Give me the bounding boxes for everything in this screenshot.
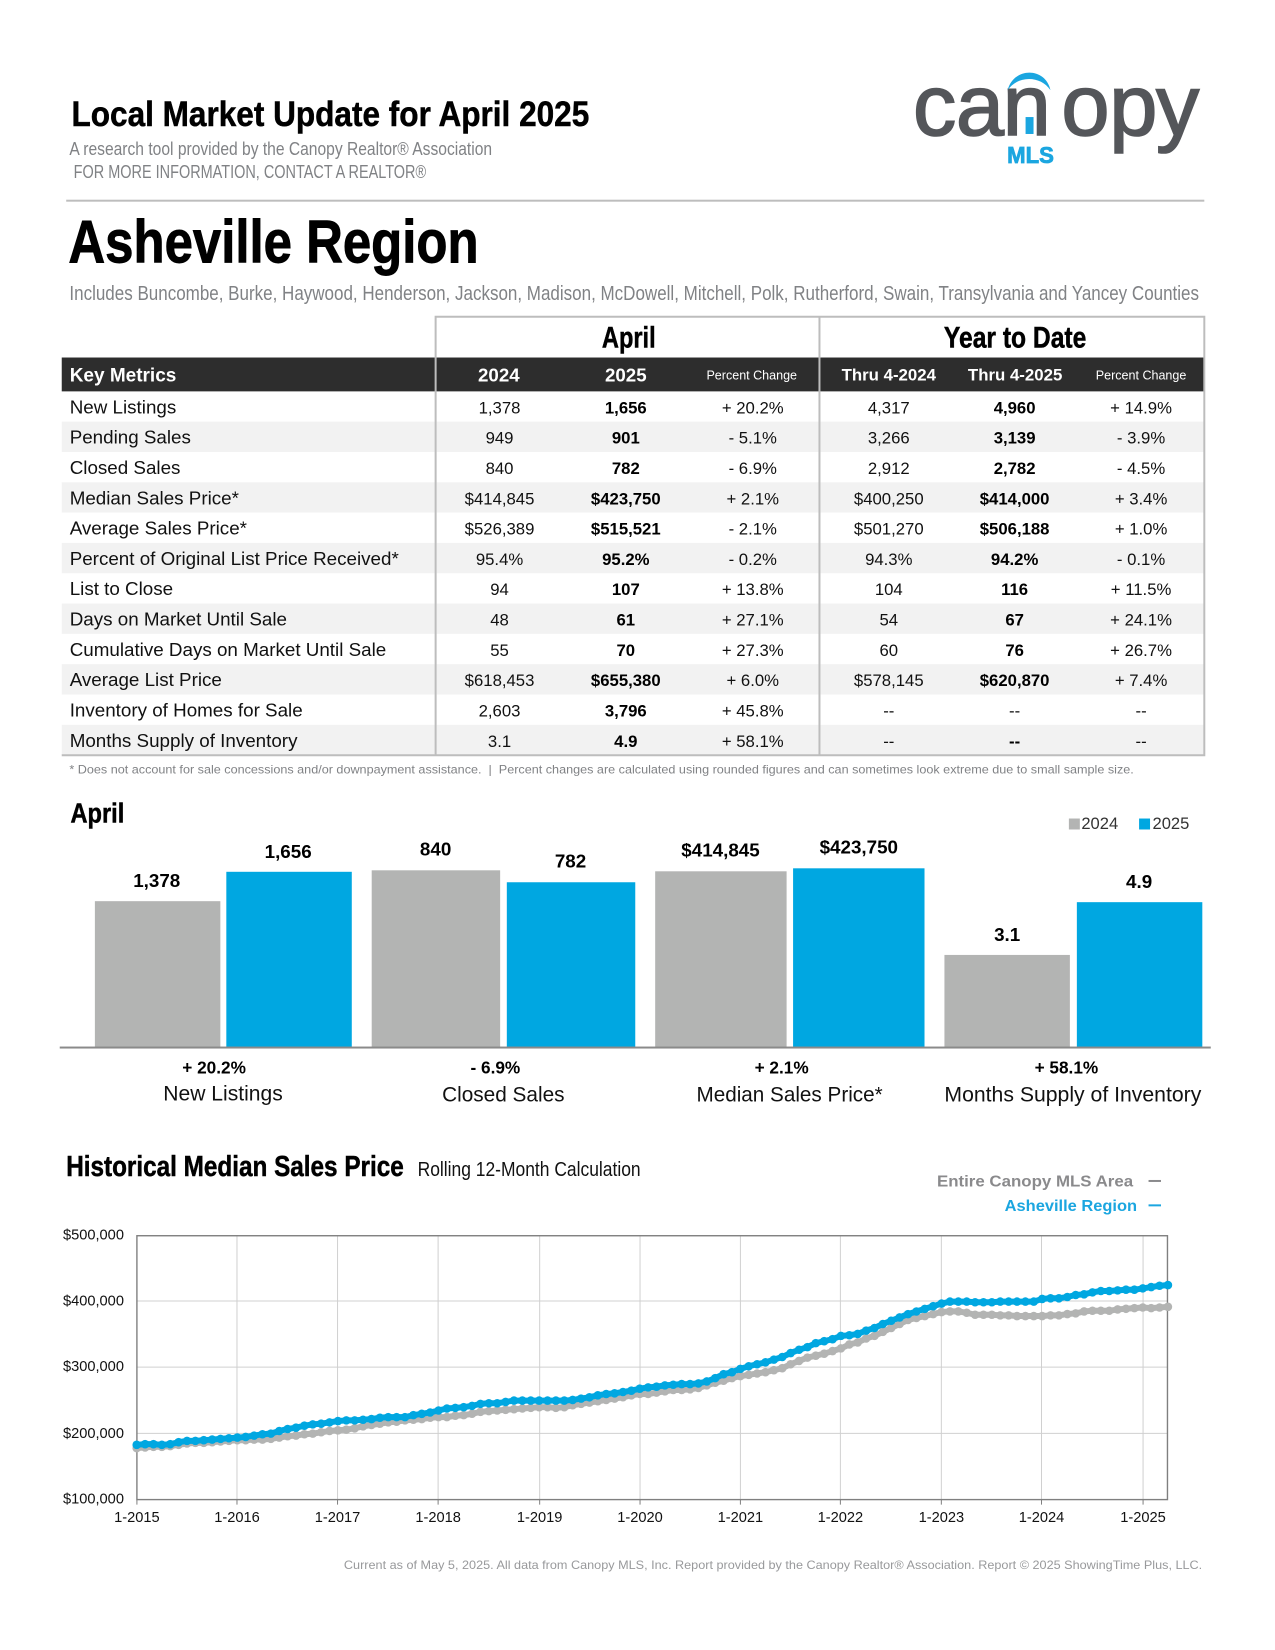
panel: key metrics table: 76 [1005, 641, 1024, 660]
bars: Median Sales Price [655, 836, 925, 1106]
bars: Months Supply of Inventory: 4.9 [1126, 871, 1152, 892]
panel: key metrics table [62, 317, 1204, 755]
panel: key metrics table: 70 [616, 641, 635, 660]
panel: key metrics table: + 27.1% [722, 611, 784, 630]
panel: key metrics table: $400,250 [854, 489, 924, 508]
bars: Months Supply of Inventory: 3.1 [994, 924, 1020, 945]
panel: key metrics table: 67 [1005, 611, 1024, 630]
column group headings: April [602, 322, 656, 355]
bars: New Listings [95, 841, 352, 1105]
table header row: Key Metrics [70, 365, 176, 386]
panel: key metrics table: -- [1009, 732, 1020, 751]
bars: Months Supply of Inventory: + 58.1% [1035, 1057, 1098, 1077]
panel: key metrics table: - 3.9% [1117, 429, 1165, 448]
panel: key metrics table: 94 [490, 580, 509, 599]
panel: key metrics table: -- [1009, 701, 1020, 720]
panel: key metrics table: -- [1136, 732, 1147, 751]
panel: key metrics table: + 27.3% [722, 641, 784, 660]
panel: key metrics table: 94.3% [865, 550, 913, 569]
x axis labels: 1-2019 [517, 1510, 562, 1526]
panel: key metrics table: 95.2% [602, 550, 650, 569]
x axis labels: 1-2020 [617, 1510, 663, 1526]
panel: key metrics table: $526,389 [465, 520, 534, 539]
chart gridlines [137, 1236, 1167, 1500]
icon: logo door [1026, 117, 1034, 134]
panel: key metrics table: - 2.1% [729, 520, 777, 539]
x axis labels: 1-2025 [1120, 1510, 1166, 1526]
bars: Median Sales Price: $423,750 [820, 836, 898, 857]
panel: key metrics table: 54 [879, 611, 898, 630]
bars: Closed Sales: 782 [555, 850, 586, 871]
panel: key metrics table: $515,521 [591, 520, 661, 539]
title: Local Market Update for April 2025 [71, 95, 589, 134]
table rows: 1,378 [479, 398, 520, 417]
line chart legend: Entire Canopy MLS Area [937, 1173, 1133, 1190]
y axis labels: $300,000 [63, 1359, 124, 1375]
bars: New Listings: + 20.2% [182, 1057, 246, 1077]
panel: key metrics table: 61 [616, 611, 635, 630]
heading: April: April [70, 798, 124, 829]
x axis labels: 1-2024 [1019, 1510, 1064, 1526]
heading: historical chart: Rolling 12-Month Calculation [418, 1159, 641, 1181]
subtitle block: FOR MORE INFORMATION, CONTACT A REALTOR® [74, 161, 426, 182]
x axis labels: 1-2017 [315, 1510, 360, 1526]
panel: key metrics table: Months Supply of Inventory [70, 730, 298, 751]
panel: key metrics table: $618,453 [465, 671, 534, 690]
bars: New Listings: 1,656 [265, 841, 312, 862]
panel: key metrics table: -- [883, 701, 894, 720]
table header row [62, 358, 1204, 391]
x axis labels: 1-2023 [919, 1510, 964, 1526]
panel: key metrics table: $578,145 [854, 671, 924, 690]
panel: key metrics table: Percent of Original List Price Received* [70, 548, 399, 569]
bars: Closed Sales: - 6.9% [470, 1057, 520, 1077]
panel: key metrics table: -- [1136, 701, 1147, 720]
panel: key metrics table: 4.9 [614, 732, 637, 751]
panel: key metrics table: + 3.4% [1115, 489, 1167, 508]
bars: New Listings: 1,378 [133, 870, 180, 891]
panel: key metrics table: + 11.5% [1111, 580, 1171, 599]
panel: key metrics table: - 0.2% [729, 550, 777, 569]
panel: key metrics table: Days on Market Until Sale [70, 609, 287, 630]
panel: key metrics table: Pending Sales [70, 427, 191, 448]
logo MLS text: MLS [1007, 142, 1054, 168]
y axis labels: $200,000 [63, 1426, 124, 1442]
panel: key metrics table: Cumulative Days on Market Until Sale [70, 639, 386, 660]
column group headings: Year to Date [944, 322, 1086, 355]
panel: key metrics table: 3,266 [868, 429, 910, 448]
panel: key metrics table: + 7.4% [1115, 671, 1167, 690]
y axis labels [63, 1228, 124, 1508]
panel: key metrics table: 104 [875, 580, 903, 599]
table rows: + 14.9% [1110, 398, 1172, 417]
bars: New Listings: New Listings [163, 1082, 283, 1105]
footer credit: Current as of May 5, 2025. All data from Canopy MLS, Inc. Report provided by the Canopy Realtor® Association. Report © 2025 ShowingTime Plus, LLC. [344, 1558, 1202, 1572]
panel: key metrics table: Average Sales Price* [70, 518, 248, 539]
panel: key metrics table: 949 [486, 429, 513, 448]
table header row: 2025 [605, 364, 647, 385]
panel: key metrics table: $506,188 [980, 520, 1049, 539]
panel: key metrics table: $501,270 [854, 520, 924, 539]
heading: historical chart: Historical Median Sales Price [66, 1151, 404, 1183]
panel: key metrics table: Inventory of Homes for Sale [70, 699, 303, 720]
bars: Months Supply of Inventory: Months Supply of Inventory [944, 1083, 1202, 1106]
panel: key metrics table: 2,782 [994, 459, 1036, 478]
bars: Closed Sales: 840 [420, 838, 451, 859]
panel: key metrics table: $423,750 [591, 489, 661, 508]
table rows: 4,960 [994, 398, 1036, 417]
heading: historical chart [66, 1151, 641, 1183]
panel: key metrics table: 60 [879, 641, 898, 660]
panel: key metrics table: $414,845 [465, 489, 534, 508]
subtitle block: A research tool provided by the Canopy Realtor® Association [69, 138, 492, 159]
panel: key metrics table: -- [883, 732, 894, 751]
x axis labels: 1-2015 [114, 1510, 160, 1526]
panel: key metrics table: 107 [612, 580, 640, 599]
panel: key metrics table: - 4.5% [1117, 459, 1165, 478]
bars: Closed Sales: Closed Sales [442, 1083, 565, 1106]
y axis labels: $100,000 [63, 1492, 124, 1508]
bar chart legend: 2024 [1081, 814, 1118, 833]
x axis labels [114, 1510, 1166, 1526]
panel: key metrics table: Median Sales Price* [70, 487, 240, 508]
panel: key metrics table: 55 [490, 641, 509, 660]
panel: key metrics table: 840 [486, 459, 513, 478]
panel: key metrics table: Average List Price [70, 669, 222, 690]
panel: key metrics table: List to Close [70, 578, 173, 599]
icon: logo roof arch [1008, 73, 1050, 90]
line chart: historical median sales price [63, 1228, 1168, 1526]
panel: key metrics table: 2,912 [868, 459, 910, 478]
footnote: * Does not account for sale concessions and/or downpayment assistance. | Percent changes are calculated using rounded figures and can sometimes look extreme due to small sample size. [69, 763, 1134, 777]
bars: Months Supply of Inventory [944, 871, 1202, 1106]
line chart legend [937, 1173, 1161, 1215]
panel: key metrics table: 901 [612, 429, 640, 448]
panel: key metrics table: $414,000 [980, 489, 1049, 508]
table header row: Thru 4-2025 [968, 365, 1062, 384]
bars: Median Sales Price: + 2.1% [755, 1057, 809, 1077]
line chart legend: Asheville Region [1005, 1198, 1137, 1215]
bar chart legend: 2025 [1153, 814, 1189, 833]
panel: key metrics table: $655,380 [591, 671, 661, 690]
panel: key metrics table: 48 [490, 611, 509, 630]
bars: Median Sales Price: Median Sales Price* [696, 1083, 883, 1106]
panel: key metrics table: + 24.1% [1110, 611, 1172, 630]
bars: Closed Sales [372, 838, 635, 1106]
panel: key metrics table: 3.1 [488, 732, 511, 751]
table rows [70, 396, 1172, 417]
panel: key metrics table: 116 [1001, 580, 1028, 599]
panel: key metrics table: - 5.1% [729, 429, 777, 448]
panel: key metrics table: 2,603 [479, 701, 520, 720]
bar chart: April comparison [60, 836, 1211, 1106]
table header row: 2024 [478, 364, 520, 385]
panel: key metrics table: + 13.8% [722, 580, 784, 599]
logo: Canopy MLS: canopy [913, 58, 1200, 154]
panel: key metrics table: + 6.0% [726, 671, 779, 690]
table rows: New Listings [70, 396, 176, 417]
table rows: 4,317 [868, 398, 910, 417]
bars: Median Sales Price: $414,845 [681, 839, 760, 860]
panel: key metrics table: + 26.7% [1110, 641, 1172, 660]
bar chart legend [1069, 814, 1189, 833]
panel: key metrics table: $620,870 [980, 671, 1049, 690]
table header row: Thru 4-2024 [842, 365, 937, 384]
panel: key metrics table: Closed Sales [70, 457, 180, 478]
panel: key metrics table: + 1.0% [1115, 520, 1167, 539]
y axis labels: $400,000 [63, 1293, 124, 1309]
x axis labels: 1-2018 [415, 1510, 461, 1526]
panel: key metrics table: 3,139 [994, 429, 1036, 448]
panel: key metrics table: + 2.1% [726, 489, 779, 508]
panel: key metrics table: 95.4% [476, 550, 523, 569]
panel: key metrics table: 3,796 [605, 701, 647, 720]
table row shading [62, 422, 1204, 755]
x axis labels: 1-2016 [214, 1510, 260, 1526]
panel: key metrics table: - 0.1% [1117, 550, 1165, 569]
x axis labels: 1-2021 [718, 1510, 763, 1526]
table rows: 1,656 [605, 398, 647, 417]
series: Asheville Region [137, 1285, 1168, 1445]
heading: region name: Asheville Region [68, 207, 479, 275]
series: Entire Canopy MLS Area [137, 1307, 1168, 1448]
y axis labels: $500,000 [63, 1228, 124, 1244]
x axis labels: 1-2022 [818, 1510, 863, 1526]
table header row: Percent Change [1096, 368, 1186, 382]
panel: key metrics table: 782 [612, 459, 640, 478]
column group headings [602, 322, 1086, 355]
subtitle block [69, 138, 492, 182]
table rows: + 20.2% [722, 398, 784, 417]
table header row: Percent Change [706, 368, 797, 382]
panel: key metrics table: 94.2% [991, 550, 1038, 569]
panel: key metrics table: + 45.8% [722, 701, 784, 720]
panel: key metrics table: - 6.9% [729, 459, 777, 478]
panel: key metrics table: + 58.1% [722, 732, 784, 751]
